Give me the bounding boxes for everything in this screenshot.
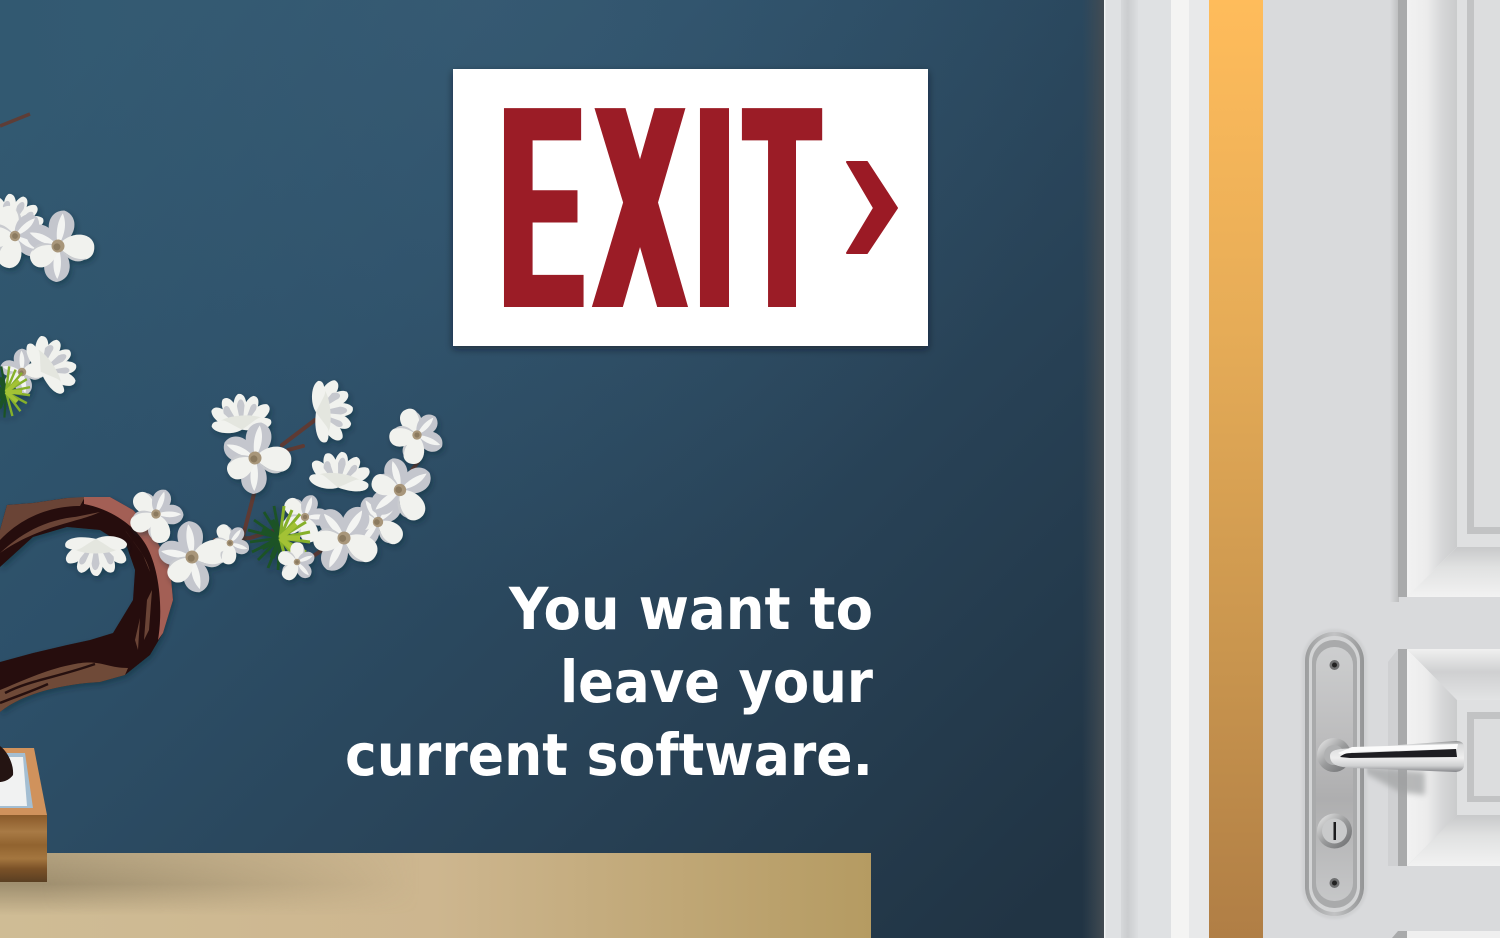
plant pot — [0, 746, 47, 882]
exit sign lettering: I — [697, 46, 732, 369]
blossom: side fan top — [307, 375, 356, 446]
blossom: small centre — [275, 488, 335, 548]
top screw — [1330, 660, 1340, 670]
exit sign lettering — [501, 45, 818, 370]
exit sign lettering: X — [596, 46, 684, 369]
blossom: centre fan — [305, 447, 375, 498]
blossom: fan under the trunk — [63, 533, 130, 576]
blossom: near trunk — [122, 482, 189, 548]
branches — [215, 420, 418, 562]
table — [0, 853, 871, 938]
bottom door panel edge — [1392, 931, 1500, 938]
door frame — [1104, 0, 1209, 938]
headline — [345, 575, 873, 789]
left upper twig — [0, 114, 30, 126]
blossom: small lower — [267, 533, 325, 591]
bonsai trunk — [0, 497, 173, 712]
back plate — [1302, 629, 1367, 919]
exit sign lettering: E — [501, 47, 583, 370]
keyhole — [1317, 814, 1352, 848]
middle left blossoms — [0, 325, 89, 418]
upper door panel — [1390, 0, 1500, 602]
blossom: right small — [380, 400, 452, 472]
wall background — [0, 0, 1104, 938]
lever — [1317, 738, 1464, 772]
blossom: small low — [205, 519, 254, 568]
blossom: centre large — [294, 488, 394, 588]
blossom: side fan top left — [207, 392, 274, 438]
headline: You want to — [508, 575, 873, 643]
blossom: fan behind — [337, 481, 420, 563]
exit sign panel — [453, 69, 928, 346]
bottom screw — [1330, 878, 1340, 888]
blossom: right medium — [352, 442, 449, 538]
exit sign lettering: T — [746, 45, 818, 369]
door — [1263, 0, 1500, 938]
exit sign arrow — [847, 162, 897, 253]
pine needles — [248, 506, 310, 570]
headline: current software. — [345, 721, 873, 789]
main blossom cluster — [63, 375, 452, 599]
blossom: large — [216, 418, 295, 497]
headline: leave your — [560, 648, 873, 716]
door handle — [1302, 629, 1464, 919]
orange light in door gap — [1209, 0, 1263, 938]
lower door panel — [1388, 649, 1500, 866]
blossom: large low — [150, 514, 235, 599]
upper left blossoms — [0, 184, 98, 285]
handle shadow — [1350, 765, 1425, 795]
